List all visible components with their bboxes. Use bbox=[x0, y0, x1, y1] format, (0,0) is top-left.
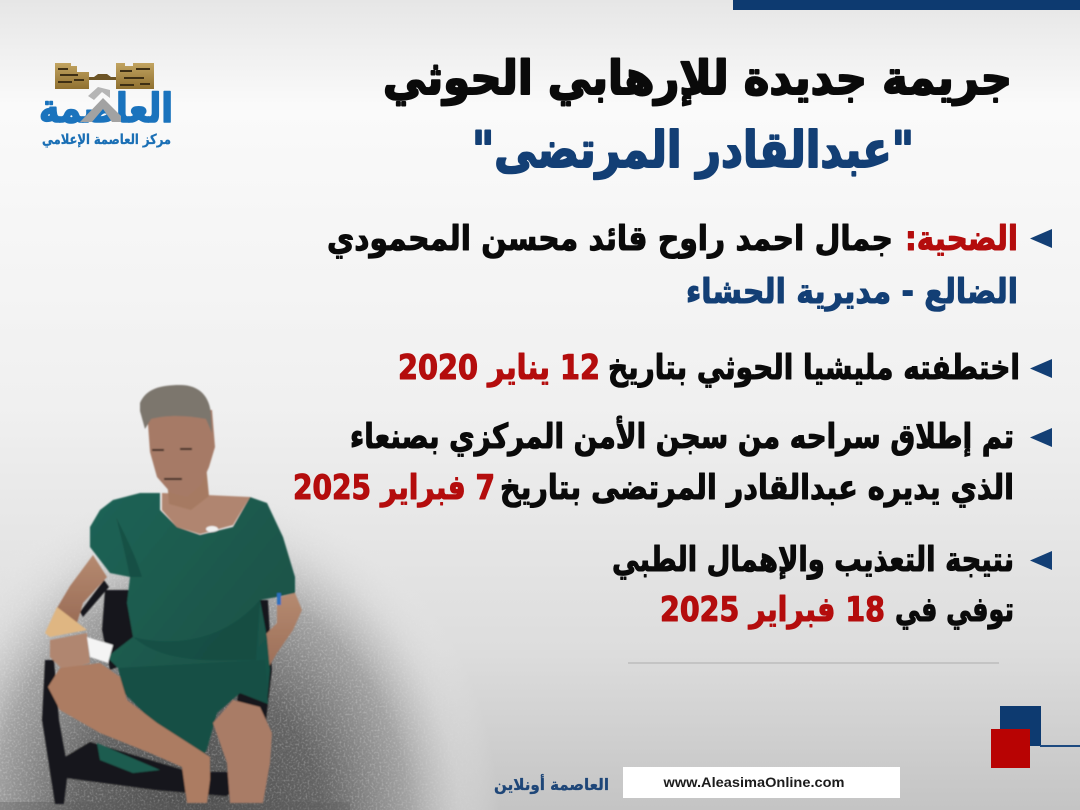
divider bbox=[628, 662, 999, 664]
right arm bbox=[230, 593, 302, 673]
left wrist bandage bbox=[45, 607, 87, 637]
logo: name: العاصمة bbox=[39, 86, 173, 132]
victim name: جمال احمد راوح قائد محسن المحمودي bbox=[327, 219, 893, 259]
victim origin: الضالع - مديرية الحشاء bbox=[686, 272, 1018, 312]
release date: 7 فبراير 2025 bbox=[293, 468, 495, 508]
title line 1: جريمة جديدة للإرهابي الحوثي bbox=[383, 51, 1012, 106]
face bbox=[147, 410, 215, 497]
bullet marker 1 bbox=[1030, 229, 1052, 248]
death text: توفي في bbox=[895, 590, 1014, 630]
eyes and mouth bbox=[152, 448, 192, 480]
bullet list bbox=[293, 219, 1052, 630]
logo: subtitle: مركز العاصمة الإعلامي bbox=[42, 132, 171, 148]
title bbox=[383, 51, 1012, 180]
victim label: الضحية: bbox=[905, 219, 1018, 259]
footer website box bbox=[623, 767, 900, 798]
head bbox=[140, 385, 215, 497]
left arm bbox=[57, 555, 107, 623]
chair bottom cloth bbox=[97, 743, 160, 773]
crossed leg bbox=[48, 663, 210, 803]
footer label: العاصمة أونلاين bbox=[494, 774, 609, 794]
bullet marker 2 bbox=[1030, 359, 1052, 378]
logo: house mark bbox=[80, 87, 121, 122]
title line 2: "عبدالقادر المرتضى" bbox=[472, 121, 914, 180]
iv cannula bbox=[277, 593, 281, 605]
logo: gold buildings bbox=[55, 63, 154, 89]
photo vignette bbox=[0, 542, 475, 810]
bullet marker 4 bbox=[1030, 551, 1052, 570]
chest dressing bbox=[206, 526, 218, 532]
neck bbox=[166, 465, 209, 510]
top bar bbox=[733, 0, 1080, 10]
chair bbox=[42, 580, 272, 804]
chest skin bbox=[162, 493, 250, 534]
logo bbox=[39, 63, 173, 148]
gown sleeve folds bbox=[116, 517, 260, 660]
shorts bbox=[118, 660, 268, 763]
left hand bbox=[50, 633, 90, 670]
hair bbox=[140, 385, 212, 433]
abduction date: 12 يناير 2020 bbox=[398, 348, 600, 388]
hand bandage bbox=[87, 637, 113, 663]
footer website box: www.AleasimaOnline.com bbox=[662, 774, 844, 790]
bullet marker 3 bbox=[1030, 428, 1052, 447]
decorative squares bbox=[991, 706, 1080, 768]
green gown bbox=[90, 493, 295, 743]
death date: 18 فبراير 2025 bbox=[660, 590, 885, 630]
right leg bbox=[213, 700, 272, 803]
portrait illustration bbox=[42, 385, 302, 804]
